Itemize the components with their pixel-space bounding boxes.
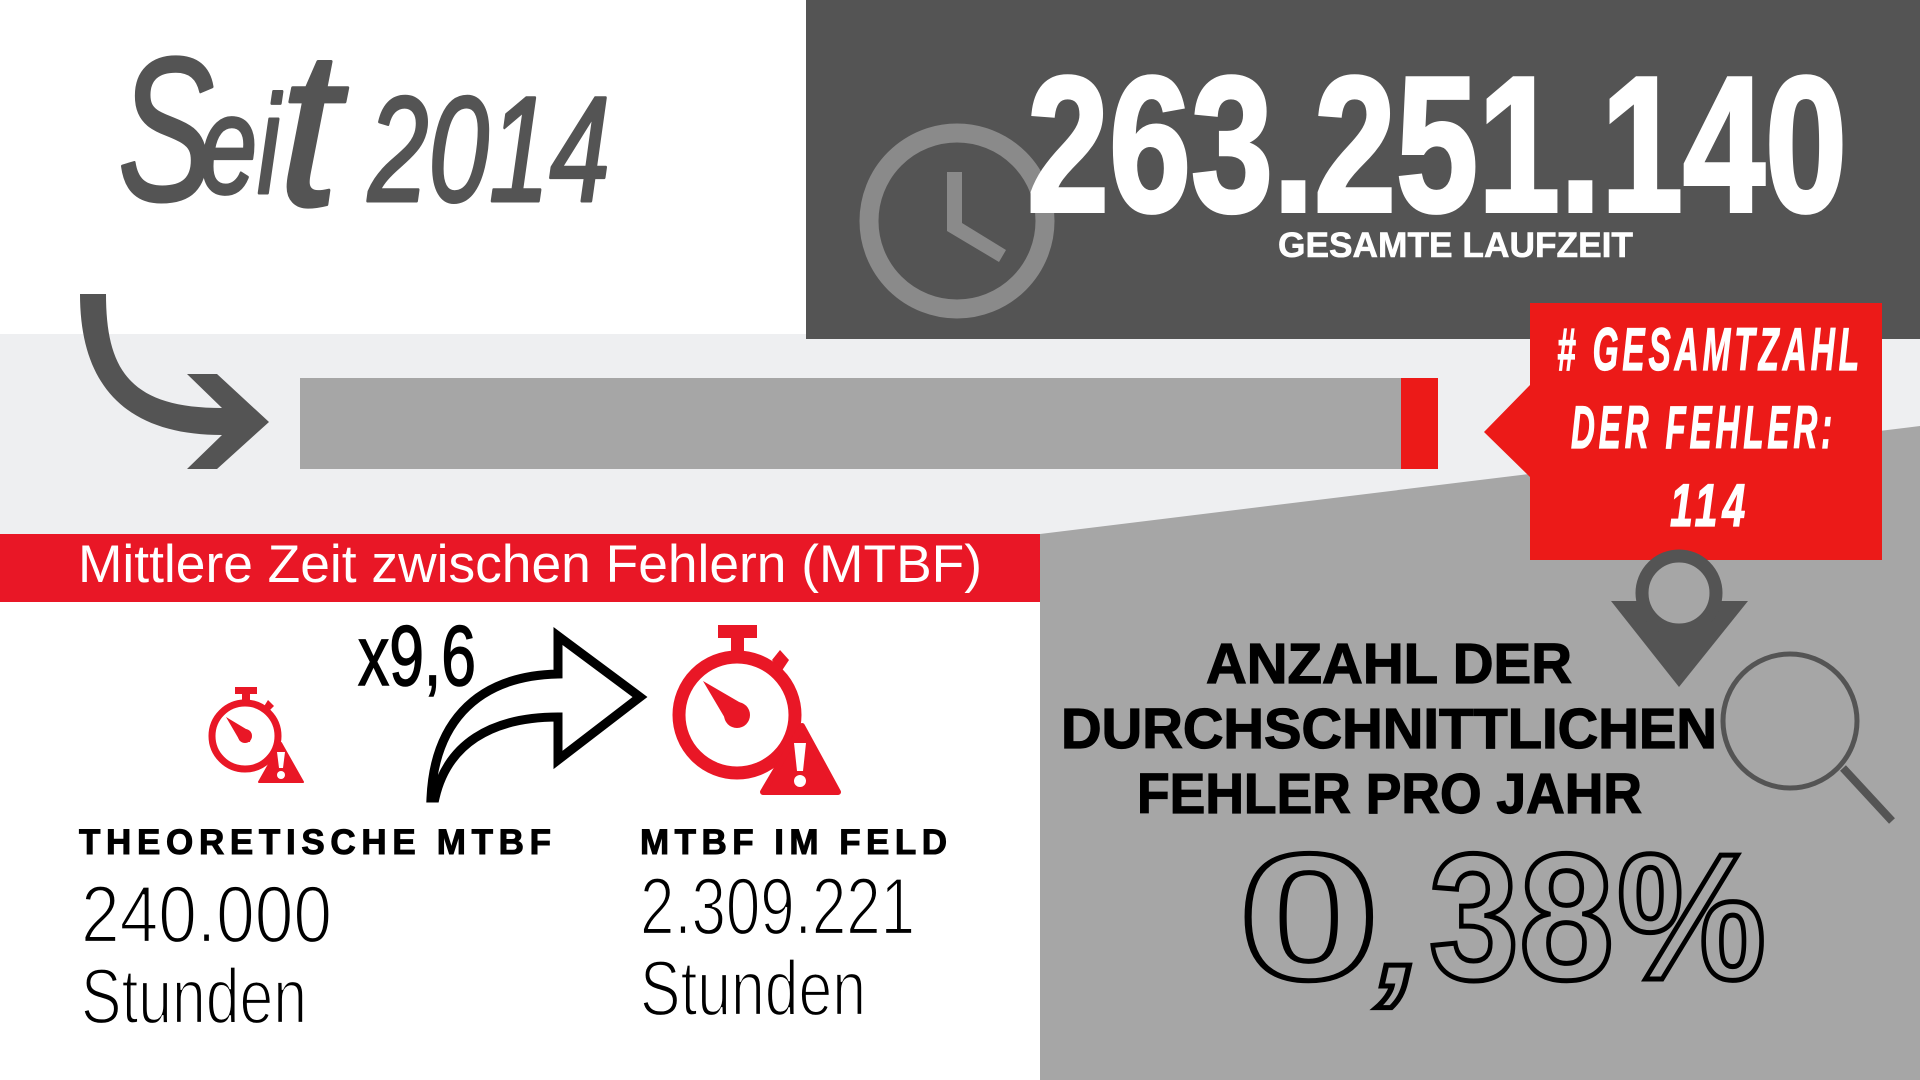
multiplier label: x9,6 (358, 609, 476, 704)
heading: average errors per year: DURCHSCHNITTLICHEN (1061, 697, 1717, 761)
value: 240.000 Stunden (81, 870, 332, 1040)
heading: average errors per year: ANZAHL DER (1206, 632, 1572, 696)
icon: clock (869, 133, 1045, 309)
grey panel: average errors background (1040, 426, 1920, 1080)
total runtime label: GESAMTE LAUFZEIT (1278, 226, 1633, 265)
icon: magnifying glass (1723, 654, 1892, 821)
percentage value: , (1376, 859, 1423, 1016)
label: theoretical MTBF (79, 823, 551, 1040)
heading: average errors per year (1061, 632, 1717, 826)
callout: total number of errors (1484, 303, 1882, 560)
heading: average errors per year: FEHLER PRO JAHR (1137, 762, 1642, 826)
title: Seit 2014: t (278, 5, 348, 253)
callout: total number of errors: 114 (1670, 472, 1750, 539)
icon: small stopwatch with warning (212, 687, 303, 782)
icon: map pin (1611, 556, 1748, 687)
value: 240.000 Stunden: 240.000 (81, 870, 332, 960)
value: 2.309.221 Stunden: 2.309.221 (640, 862, 915, 952)
percentage value: 8 (1519, 817, 1614, 1018)
value: 240.000 Stunden: Stunden (81, 952, 307, 1040)
title: Seit 2014: S (118, 15, 214, 244)
percentage value: 3 (1429, 817, 1519, 1018)
title: Seit 2014 (118, 5, 610, 253)
value: 2.309.221 Stunden (640, 862, 915, 1032)
arrow: curved x9,6 outline (431, 636, 640, 798)
label: MTBF in the field (640, 823, 947, 1032)
percentage value: % (1617, 817, 1766, 1018)
label: theoretical MTBF: THEORETISCHE MTBF (79, 823, 551, 862)
title: Seit 2014: 2014 (367, 65, 610, 233)
value: 2.309.221 Stunden: Stunden (640, 944, 866, 1032)
bar chart: runtime with errors (300, 378, 1438, 469)
percentage value (1238, 817, 1766, 1018)
heading bar: MTBF: Mittlere Zeit zwischen Fehlern (MTBF) (78, 535, 982, 594)
label: MTBF in the field: MTBF IM FELD (640, 823, 947, 862)
arrow: curved pointing to bar (80, 294, 269, 469)
panel: total runtime (806, 0, 1920, 339)
light grey band (0, 334, 1920, 534)
icon: large stopwatch with warning (679, 625, 838, 792)
percentage value: 0 (1238, 817, 1380, 1018)
title: Seit 2014: ei (200, 66, 283, 223)
